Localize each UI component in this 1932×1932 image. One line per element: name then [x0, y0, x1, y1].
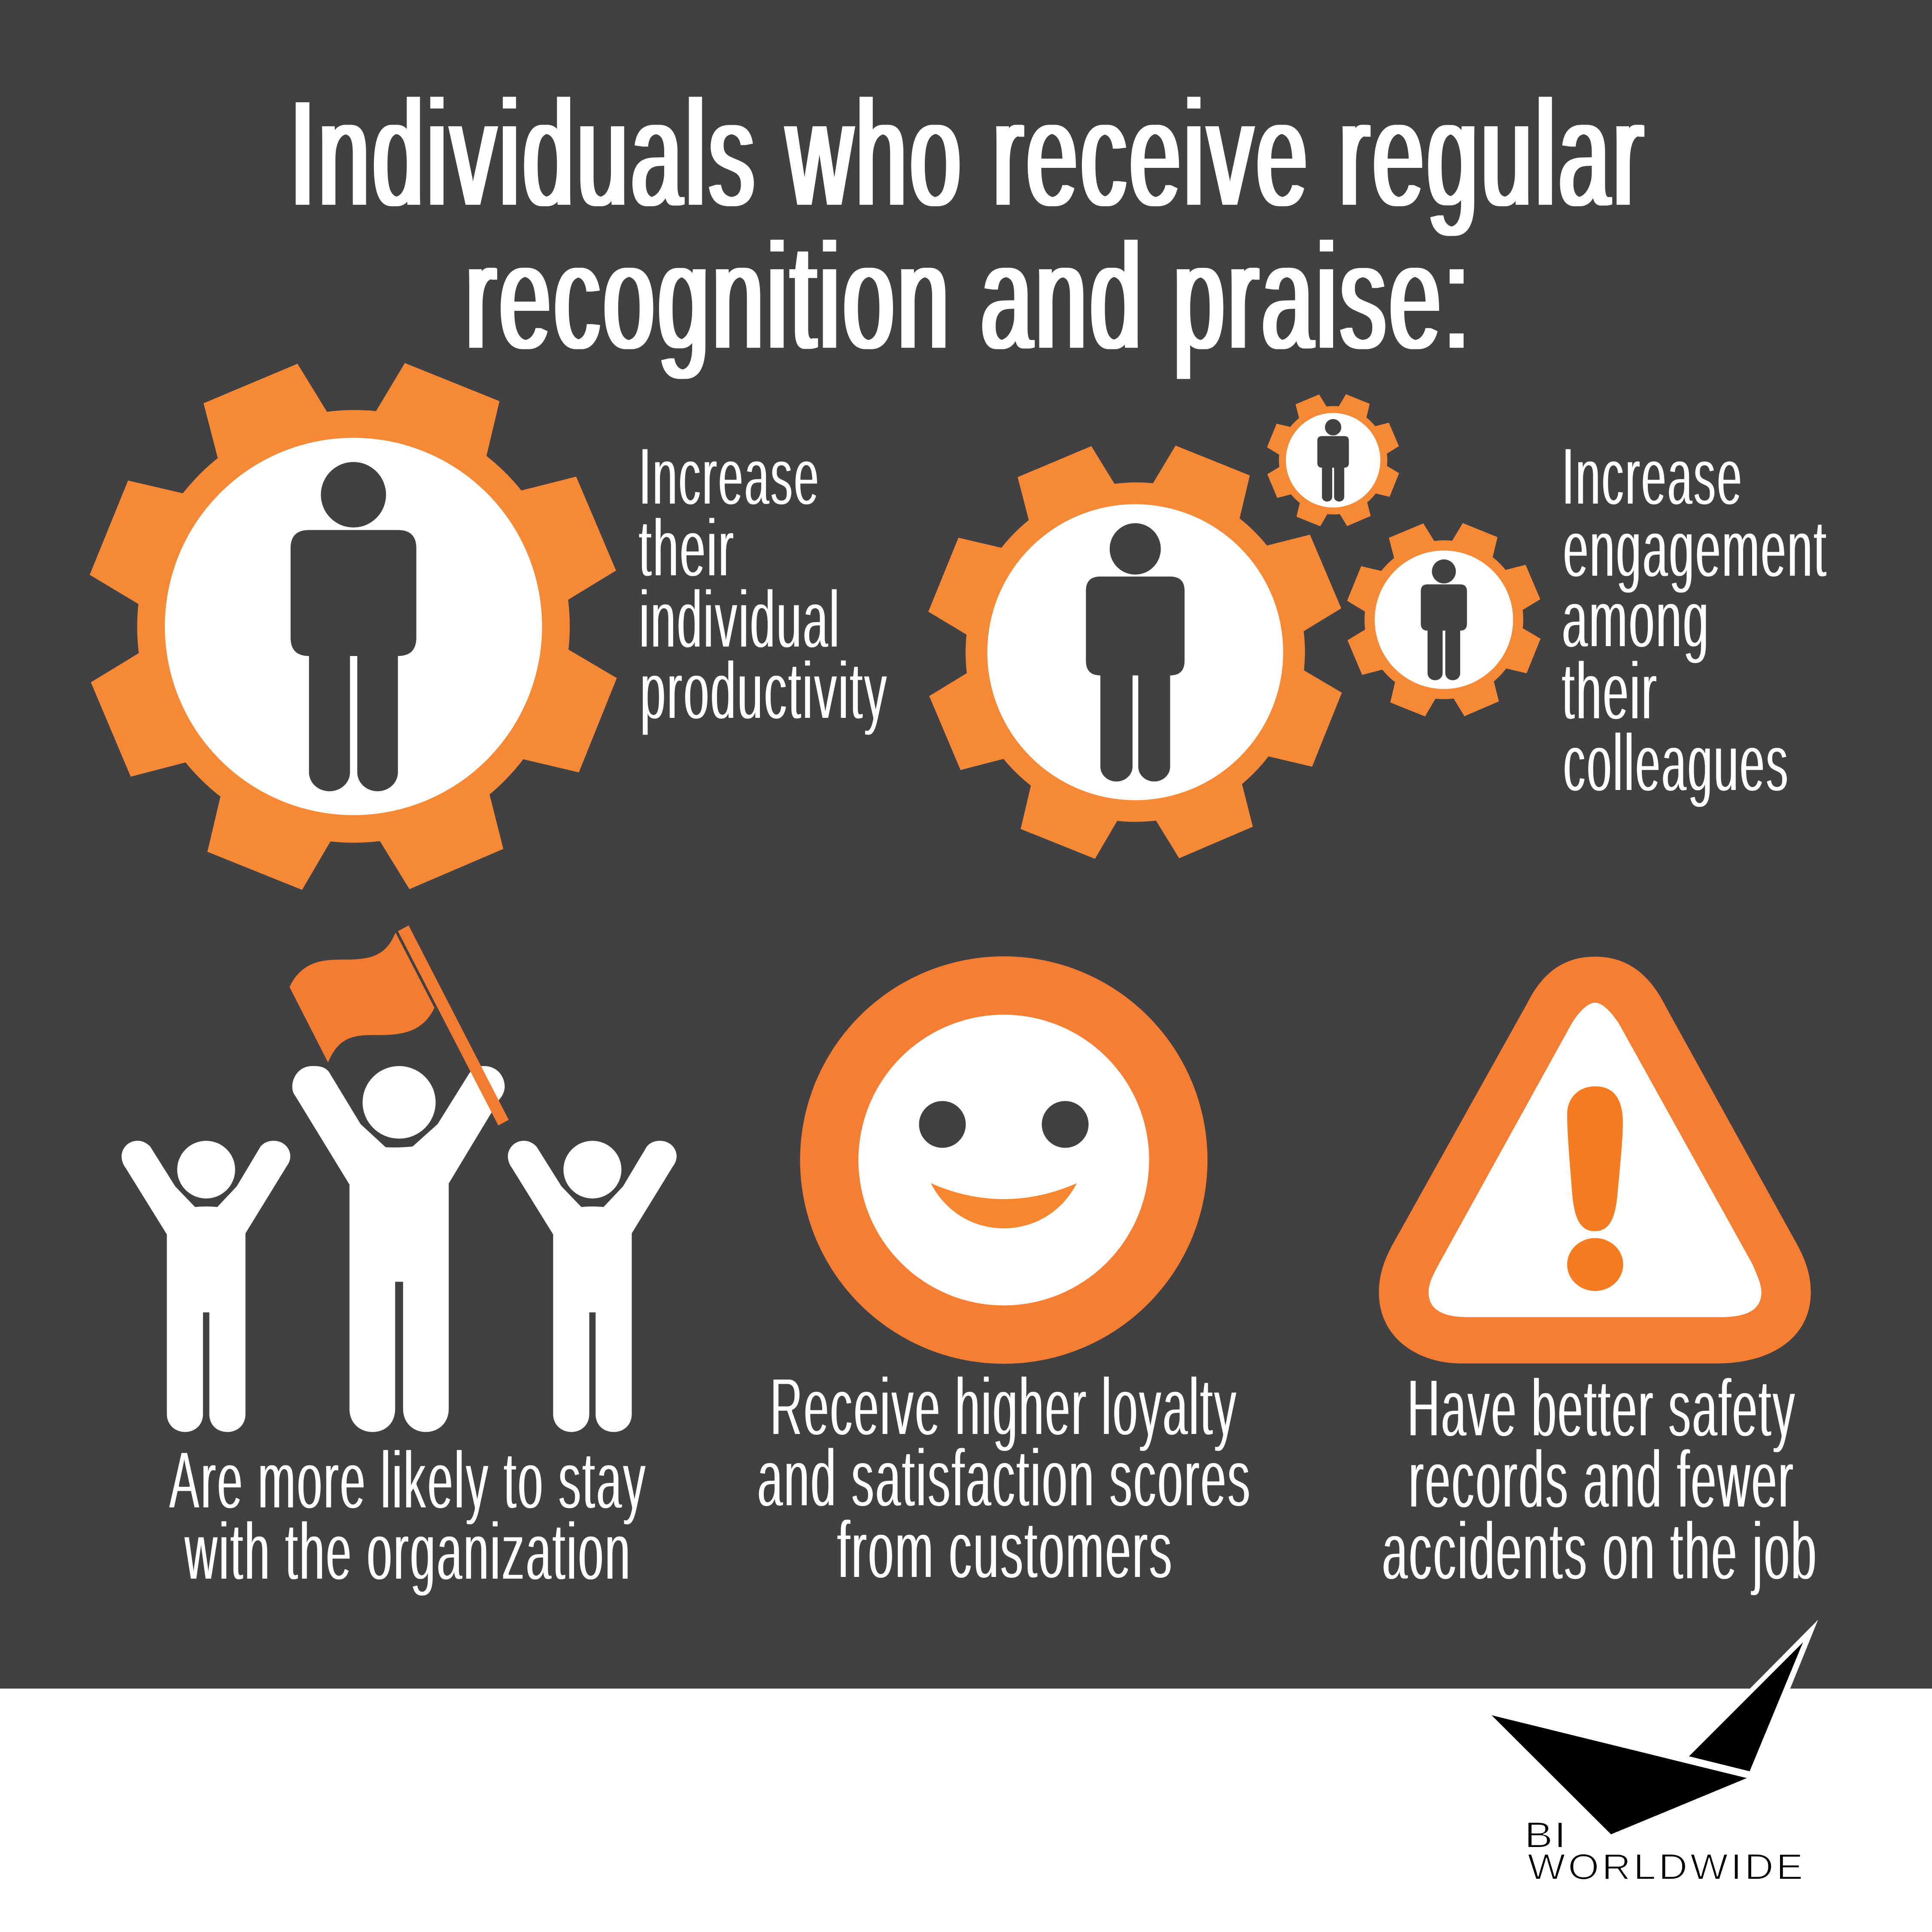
text: more likely to stay [169, 1435, 647, 1597]
icon: smiley face [800, 957, 1207, 1364]
icon: large gear with person [90, 363, 617, 890]
icon: small gear with person (top) [1267, 394, 1399, 526]
logo wordmark [1525, 1815, 1806, 1887]
text: individual productivity: Increase [639, 431, 820, 522]
text: loyalty and satisfaction [757, 1361, 1252, 1595]
text: individual productivity: productivity [640, 645, 888, 736]
text: loyalty and satisfaction: Receive higher loyalty [770, 1361, 1238, 1452]
text: engagement among colleagues: Increase [1562, 431, 1743, 522]
person: left [122, 1141, 290, 1432]
text: individual productivity [639, 431, 888, 736]
text: individual productivity: their [639, 503, 735, 594]
text: engagement among colleagues: their [1562, 646, 1658, 737]
text: engagement among colleagues: among [1562, 574, 1710, 665]
text: engagement among colleagues [1562, 431, 1828, 808]
exclamation mark [1567, 1086, 1623, 1291]
text: individual productivity: individual [639, 574, 841, 665]
title [290, 70, 1646, 381]
person: right [508, 1141, 677, 1432]
icon: small gear with person (right) [1347, 523, 1540, 717]
logo wordmark: BI [1525, 1815, 1567, 1855]
text: more likely to stay: Are more likely to stay [169, 1435, 647, 1526]
icon: warning triangle [1379, 957, 1811, 1364]
person: centre [292, 1066, 505, 1432]
logo: BI Worldwide [1492, 1620, 1818, 1887]
text: more likely to stay: with the organization [184, 1506, 632, 1597]
icon: three cheering people with flag [122, 926, 677, 1432]
text: safety records [1382, 1363, 1818, 1597]
logo wordmark: WORLDWIDE [1528, 1847, 1806, 1887]
logo mark [1492, 1620, 1818, 1835]
text: loyalty and satisfaction: and satisfaction scores [757, 1433, 1252, 1524]
icon: medium gear with person [928, 446, 1342, 859]
text: loyalty and satisfaction: from customers [837, 1504, 1173, 1595]
flag [289, 926, 509, 1126]
